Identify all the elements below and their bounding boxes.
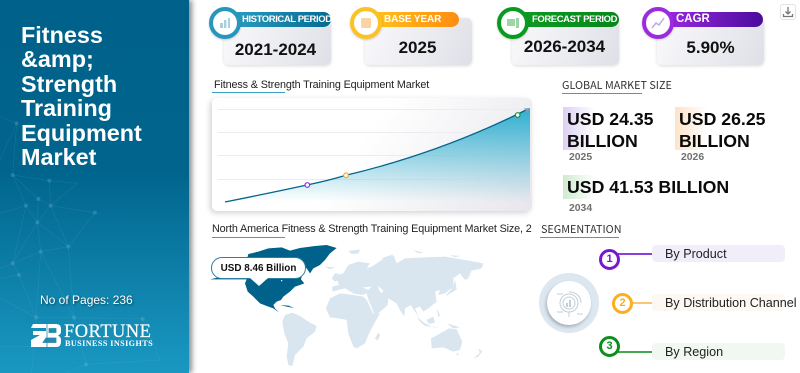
segment bar: product <box>652 245 785 262</box>
badge: 3 <box>599 336 620 357</box>
stat: 2025 <box>567 109 654 151</box>
icon: download <box>780 4 796 20</box>
heading: global market size: GLOBAL MARKET SIZE <box>562 77 672 93</box>
year: 2025: 2025 <box>569 152 592 163</box>
icon: segmentation hub <box>539 273 599 333</box>
callout: north america value <box>211 257 306 279</box>
label: by product: By Product <box>665 247 727 261</box>
stat: 2025: USD 24.35 <box>567 109 654 129</box>
forecast value: 2026-2034 <box>524 37 605 56</box>
stat: 2026 <box>679 109 766 151</box>
year: 2034: 2034 <box>569 203 592 214</box>
panel: forecast period <box>496 7 620 67</box>
title <box>21 22 142 170</box>
icon: calendar <box>350 7 382 39</box>
historical label <box>233 12 331 27</box>
stat: 2034: USD 41.53 BILLION <box>567 177 729 197</box>
panel: base year <box>349 7 473 67</box>
badge: 3: 3 <box>606 340 613 352</box>
historical label: HISTORICAL PERIOD <box>242 14 332 25</box>
area chart <box>212 98 532 211</box>
south america <box>282 313 317 366</box>
arrow head <box>524 108 530 113</box>
cagr value: 5.90% <box>686 38 735 57</box>
stat: 2026: BILLION <box>679 131 750 151</box>
title: Fitness <box>21 22 103 48</box>
base year label: BASE YEAR <box>384 14 441 25</box>
logo <box>31 322 153 348</box>
stat: 2025: BILLION <box>567 131 638 151</box>
title: Equipment <box>21 120 142 146</box>
title: Strength <box>21 70 117 96</box>
logo wordmark: FORTUNE <box>64 322 151 342</box>
marker: 2025 <box>344 173 348 178</box>
forecast label <box>521 12 619 27</box>
badge: 1: 1 <box>606 253 613 265</box>
base year value: 2025 <box>399 38 436 56</box>
cagr label <box>666 12 763 27</box>
callout: north america value: USD 8.46 Billion <box>221 263 296 274</box>
heading: north america: North America Fitness & Strength Training Equipment Market Size, 2 <box>212 223 532 235</box>
logo tagline: BUSINESS INSIGHTS <box>65 339 153 348</box>
year: 2026: 2026 <box>681 152 704 163</box>
cagr label: CAGR <box>676 13 710 25</box>
icon: forecast chart <box>497 7 529 39</box>
title: Market <box>21 144 96 170</box>
segment bar: distribution <box>652 294 785 311</box>
label: by region: By Region <box>665 345 723 359</box>
badge: 2 <box>612 293 633 314</box>
marker: 2034 <box>515 113 520 117</box>
title: &amp; <box>21 46 94 72</box>
north america highlighted <box>210 245 337 312</box>
segment bar: region <box>652 343 785 360</box>
marker: 2021 <box>305 183 310 187</box>
forecast label: FORECAST PERIOD <box>532 14 617 25</box>
world map <box>210 245 484 366</box>
panel: cagr <box>641 7 765 67</box>
stat: 2026: USD 26.25 <box>679 109 766 129</box>
panel: historical period <box>208 7 332 67</box>
heading: segmentation: SEGMENTATION <box>541 221 622 237</box>
badge: 2: 2 <box>619 297 626 309</box>
icon: growth chart <box>642 7 674 39</box>
badge: 1 <box>599 249 620 270</box>
title: Training <box>21 95 112 121</box>
network pattern <box>0 116 160 373</box>
panel: sidebar <box>0 0 189 373</box>
icon: bar chart <box>209 7 241 39</box>
icon: logo mark <box>31 324 61 347</box>
heading: market chart: Fitness & Strength Training Equipment Market <box>214 79 429 91</box>
base year label <box>374 12 459 27</box>
page count: No of Pages: 236 <box>40 293 133 307</box>
historical value: 2021-2024 <box>235 40 316 58</box>
label: by distribution channel: By Distribution Channel <box>665 296 797 310</box>
